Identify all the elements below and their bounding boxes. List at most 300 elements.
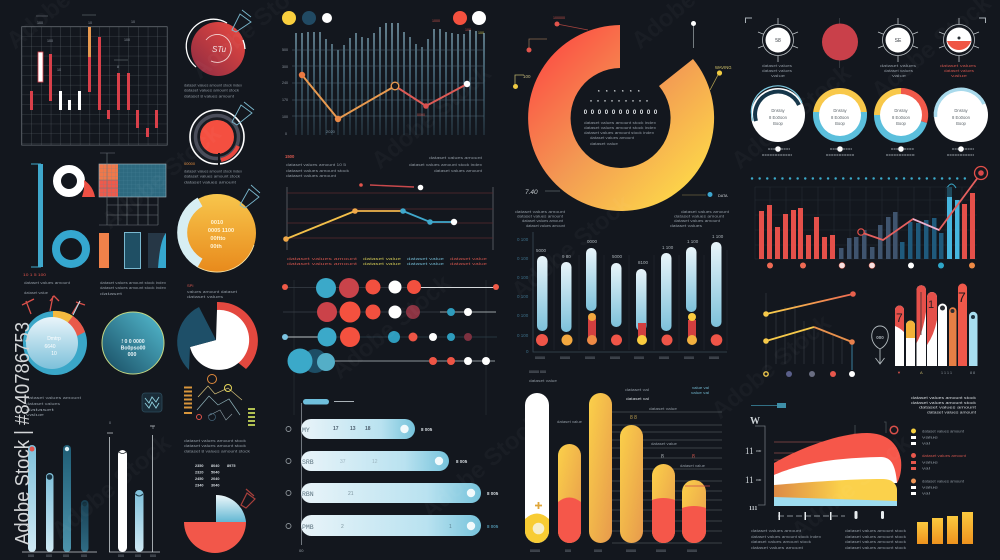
bar 2: 12	[372, 459, 378, 465]
labels: 000	[81, 554, 87, 558]
red wedge	[82, 180, 95, 197]
color-coded legend: dataset value	[450, 262, 487, 266]
watermark: vertical stock id: Adobe Stock | #840786753	[12, 322, 34, 545]
watermark: diagonal: Adobe Stock	[367, 59, 497, 175]
bar 1	[301, 419, 415, 439]
caption	[187, 283, 237, 299]
orange line	[355, 210, 403, 212]
axis labels: 300	[282, 65, 288, 69]
lines	[198, 386, 242, 400]
red arc	[221, 146, 238, 160]
caption: values amount dataset	[187, 290, 237, 294]
red arc	[217, 302, 258, 369]
panel: white and red pie	[177, 283, 258, 370]
ring card 4	[934, 88, 988, 142]
capsule bars	[537, 242, 722, 332]
value labels: 1 100	[712, 234, 724, 239]
top right text	[911, 396, 977, 414]
capsule 6	[682, 480, 706, 543]
bar 1: 17	[333, 426, 339, 432]
bar 1: 13	[350, 426, 356, 432]
x labels: 00000	[684, 356, 694, 360]
corner brackets	[746, 18, 986, 23]
labels: 0	[152, 426, 154, 430]
ring card 2	[813, 88, 867, 142]
white bar cap	[118, 451, 127, 454]
bar 8	[969, 312, 978, 366]
disc text: 10	[51, 351, 57, 357]
bright blue bars	[947, 184, 960, 259]
bracket	[755, 426, 765, 505]
panel: ring cards row	[751, 86, 988, 155]
white ring	[57, 169, 81, 193]
panel: large donut	[513, 16, 732, 228]
left text: dataset values amount	[286, 174, 336, 178]
blue bar cap	[136, 494, 143, 496]
blue bar	[38, 164, 43, 267]
trailing values: 8 005	[421, 427, 433, 432]
x labels: 000	[565, 549, 571, 553]
y labels: 0 100	[517, 237, 529, 242]
bar 3	[916, 285, 926, 366]
x labels: 00000	[659, 356, 669, 360]
center text	[584, 121, 656, 146]
axis	[22, 551, 97, 553]
gauge captions: value	[892, 74, 906, 78]
top right text: dataset values amount stock	[911, 396, 976, 400]
callout: red left	[526, 39, 547, 52]
orange block	[99, 164, 118, 180]
candle labels: 10	[88, 21, 92, 25]
gauge 2: SE	[895, 38, 902, 44]
callout: left value	[525, 189, 560, 196]
red half	[184, 522, 246, 553]
gauge captions: dataset values	[940, 64, 976, 68]
labels: 0	[109, 421, 111, 425]
axes	[533, 232, 727, 352]
ring card 3: Boop	[896, 121, 907, 126]
value labels: 1 100	[687, 239, 699, 244]
ring card 4: 8 Eo0oon	[952, 115, 971, 120]
bottom dots	[764, 371, 855, 377]
watermark: diagonal: Adobe Stock	[47, 429, 177, 545]
side text right: dataset values amount	[674, 214, 724, 218]
caption: dataset values amount stock index	[184, 84, 242, 88]
plus marker	[535, 502, 542, 509]
bar 1: 18	[365, 426, 371, 432]
blue bar	[135, 490, 144, 552]
color-coded legend: dataset value	[407, 262, 444, 266]
dotted strip	[752, 177, 968, 180]
slate rectangle	[148, 233, 166, 268]
caption: dataset 8 values amount stock	[184, 450, 250, 454]
caption: SPI	[187, 283, 193, 288]
value labels: 8100	[638, 260, 649, 265]
callout: left value: 7.40	[525, 189, 538, 196]
callout: blue right	[682, 192, 728, 198]
slate bars	[839, 212, 898, 259]
top indicator	[359, 183, 423, 190]
legend pill	[303, 399, 329, 404]
panel: mixed bar and line chart	[752, 166, 988, 268]
y axis labels: 111	[749, 506, 757, 512]
bar 4	[301, 515, 481, 536]
ring card 1: Boop	[773, 121, 784, 126]
bottom middle text: dataset values amount stock	[845, 546, 906, 550]
candle labels: 100	[124, 38, 130, 42]
top right marker	[855, 422, 886, 438]
x labels	[530, 549, 697, 553]
disc text: 0010	[211, 220, 223, 226]
blue curve fill	[158, 233, 166, 268]
captions: dataset	[100, 292, 122, 296]
block mesh	[99, 164, 166, 197]
ring card 4: Boop	[956, 121, 967, 126]
y labels: 0	[526, 349, 529, 354]
faint frame	[294, 280, 486, 415]
gauge 1: 58	[775, 38, 781, 44]
bar 5	[938, 304, 947, 366]
caption: dataset 8 values amount	[184, 94, 234, 98]
ring card 2: Boop	[835, 121, 846, 126]
panel: blue shapes and grid blocks	[23, 153, 166, 296]
color-coded legend	[287, 257, 487, 266]
bar 4: 2	[341, 524, 344, 530]
center text: dataset value	[590, 142, 618, 146]
guide lines	[612, 412, 722, 543]
markers	[299, 72, 470, 122]
color-coded legend: dataset value	[363, 262, 401, 266]
bottom middle text: dataset values amount stock	[845, 540, 906, 544]
color-coded legend: dataset value	[363, 257, 401, 261]
value labels	[536, 234, 724, 265]
y labels	[517, 237, 529, 354]
markers	[763, 291, 856, 345]
x labels: 00000	[656, 549, 666, 553]
y labels: 0 100	[517, 294, 529, 299]
left text: dataset values amount stock	[286, 169, 349, 173]
gauge captions	[762, 64, 976, 78]
grid	[755, 187, 977, 259]
orange disc	[178, 194, 256, 272]
green bars	[248, 409, 255, 425]
bar 1 cap	[30, 446, 34, 452]
bar 2	[301, 451, 449, 471]
y axis labels: 000	[756, 478, 762, 482]
captions: dataset values amount	[24, 281, 70, 285]
legend caption	[334, 400, 354, 402]
bar 1: 7	[896, 311, 903, 325]
legend tag	[751, 403, 786, 408]
frame	[287, 187, 493, 250]
disc text	[208, 220, 234, 250]
labels: 000	[46, 554, 52, 558]
panel: horizontal progress bars	[286, 399, 499, 553]
legend red	[911, 453, 966, 470]
heading: 1500	[285, 154, 295, 159]
legend yellow: dataset values amount	[922, 430, 964, 434]
sticks	[22, 296, 85, 314]
teal rectangle	[124, 232, 140, 268]
callout: yellow left	[513, 74, 531, 89]
top labels: 8 8	[630, 415, 637, 421]
x ticks	[778, 511, 884, 520]
y labels: 0 100	[517, 313, 529, 318]
legend orange: val	[922, 492, 930, 496]
y axis labels	[745, 416, 762, 512]
x labels: 00000	[585, 356, 595, 360]
left text	[286, 163, 349, 178]
red area	[774, 433, 901, 483]
x labels: A	[920, 370, 923, 375]
red segments	[588, 318, 696, 340]
icon: location pin with arrow	[872, 326, 888, 364]
disc text: Dmtrp	[47, 336, 61, 342]
callout: white top	[691, 21, 696, 48]
left text: dataset values amount 10 5	[286, 163, 346, 167]
labels	[28, 554, 87, 558]
y labels: 0 100	[517, 275, 529, 280]
watermark: diagonal: Adobe Stock	[417, 409, 547, 525]
legend yellow: val	[922, 442, 930, 446]
labels: 000	[118, 554, 124, 558]
disc text: 0005 1100	[208, 228, 234, 234]
x labels	[535, 356, 719, 360]
bar 4: 1	[928, 299, 934, 311]
watermark: diagonal: Adobe Stock	[327, 269, 457, 385]
blue line	[403, 211, 454, 222]
caption: dataset values amount stock	[184, 439, 246, 443]
x labels: 00000	[560, 356, 570, 360]
icon: cone	[232, 102, 254, 125]
axis labels	[282, 48, 288, 136]
top labels	[529, 370, 709, 468]
caption: dataset values amount stock	[184, 444, 246, 448]
ring card 1: Dnsray	[771, 108, 786, 113]
bottom left text: dataset values amount stock	[751, 540, 811, 544]
line 1	[766, 294, 853, 314]
blue ring	[56, 234, 86, 264]
legend: 2040	[211, 477, 219, 481]
legend labels	[432, 19, 484, 35]
center text: dataset values amount stock index	[584, 121, 656, 125]
legend yellow: value	[922, 436, 938, 440]
top labels: value val	[692, 386, 709, 390]
side text left: dataset values amount	[526, 224, 565, 228]
candle labels: 8	[117, 65, 119, 69]
callout: yellow left: 100	[523, 74, 531, 79]
trailing values: 8 005	[456, 459, 468, 464]
side text right: dataset values	[670, 224, 702, 228]
caption	[184, 161, 242, 184]
inner ring arc	[206, 34, 231, 62]
trend line	[860, 176, 979, 240]
side text left: dataset values amount	[522, 219, 563, 223]
watermark: diagonal: Adobe Stock	[727, 59, 857, 175]
side text left: dataset values amount	[517, 214, 563, 218]
markers	[208, 374, 216, 384]
panel: half pie	[184, 489, 255, 553]
yellow area	[774, 479, 897, 502]
row 3	[282, 327, 497, 347]
orange rectangle	[99, 233, 109, 268]
icon: cone	[232, 10, 251, 32]
legend orange: dataset values amount	[922, 480, 964, 484]
color-coded legend: dataset values amount	[287, 257, 357, 261]
blue area	[774, 497, 897, 506]
gauge captions: value	[951, 74, 967, 78]
value labels: 5000	[612, 254, 623, 259]
center title: * * * * * * * * *	[590, 99, 650, 104]
bottom dots	[767, 262, 975, 268]
white sector	[190, 310, 249, 370]
bar 4	[81, 500, 88, 552]
trailing values	[421, 427, 499, 529]
gauge captions: dataset values	[884, 69, 913, 73]
caption: dataset values	[187, 295, 223, 299]
grey guide lines	[774, 442, 825, 460]
ring card 2: 8 Eo0oon	[831, 115, 850, 120]
caption: 00000	[184, 161, 196, 166]
disc	[102, 312, 164, 374]
top labels: 8	[661, 454, 664, 460]
labels: 000	[150, 554, 156, 558]
gauge value: STu	[212, 45, 227, 54]
top labels: dataset val	[625, 388, 649, 392]
captions: dataset values amount stock index	[100, 281, 166, 285]
yellow slice	[53, 311, 73, 325]
white ring	[190, 110, 244, 164]
marker	[224, 384, 232, 392]
red bars	[759, 205, 835, 259]
bar 2 cap	[47, 474, 52, 480]
gauge captions: value	[771, 74, 785, 78]
legend: 2340	[195, 484, 203, 488]
right text	[409, 156, 482, 173]
right text: dataset values amount	[434, 169, 482, 173]
bar 4: 1	[449, 524, 452, 530]
panel: teal bar chart	[22, 396, 97, 558]
icon: cone	[241, 489, 255, 508]
center title: * * * * * *	[598, 89, 642, 94]
capsule 3	[589, 393, 612, 543]
y labels: 0 100	[517, 256, 529, 261]
ring card 1: 8 Eo0oon	[769, 115, 788, 120]
legend labels: 100	[478, 31, 484, 35]
right text: dataset values amount stock index	[409, 163, 482, 167]
blue stick	[73, 301, 80, 315]
candle labels: 100	[37, 21, 43, 25]
point labels: 2020	[326, 129, 336, 134]
capsule 5	[652, 464, 675, 543]
capsule 5 red	[652, 498, 675, 543]
disc text: 6640	[44, 344, 56, 350]
labels: 000	[28, 554, 34, 558]
card indicators	[762, 146, 974, 155]
top labels: dataset value	[680, 464, 705, 468]
caption: dataset	[26, 408, 54, 412]
bar 2: 37	[340, 459, 346, 465]
candle labels: 10	[57, 68, 61, 72]
labels: 000	[135, 554, 141, 558]
end marker	[974, 166, 988, 180]
center text: dataset values amount	[590, 136, 634, 140]
labels: 000	[63, 554, 69, 558]
caption: dataset values amount	[26, 396, 81, 400]
blue bracket	[31, 164, 40, 267]
ring card 3: 8 Eo0oon	[892, 115, 911, 120]
bar 2	[906, 320, 915, 366]
center text: dataset values amount stock index	[584, 126, 656, 130]
color-coded legend: dataset value	[407, 257, 444, 261]
row 2	[283, 302, 496, 322]
center title	[584, 89, 658, 116]
red block	[99, 180, 118, 197]
teal block	[118, 164, 166, 197]
watermark: diagonal: Adobe Stock	[97, 119, 227, 235]
panel: line icons	[184, 374, 255, 488]
bottom left text: dataset values amount stock index	[751, 535, 821, 539]
row 1	[282, 278, 499, 298]
x labels: 0000	[594, 549, 602, 553]
panel: segmented blue pie	[22, 296, 87, 375]
y axis labels: W	[750, 416, 760, 427]
candle labels: 100	[47, 39, 53, 43]
spike bars	[296, 23, 484, 135]
pale quarter	[216, 495, 246, 522]
icon: cone	[240, 185, 260, 208]
watermark: diagonal: Adobe Stock	[507, 189, 637, 305]
navy bars	[900, 218, 944, 259]
frame	[107, 426, 160, 552]
value labels: 9 80	[562, 254, 571, 259]
outer ring arc	[186, 19, 245, 67]
axis labels: 240	[282, 81, 288, 85]
trailing values: 8 005	[487, 524, 499, 529]
line red segment	[395, 84, 467, 106]
axis labels: 500	[282, 48, 288, 52]
legend: 8975	[227, 464, 235, 468]
axis labels: 0	[285, 132, 287, 136]
white area	[774, 457, 897, 490]
gauge captions: dataset values	[944, 69, 974, 73]
legend	[195, 464, 235, 488]
panel: radial gauges row	[746, 18, 986, 78]
yellow line	[286, 211, 355, 239]
capsule 6 red	[682, 506, 706, 543]
watermark: diagonal: Adobe Stock	[707, 309, 837, 425]
panel: teal disc	[102, 312, 164, 374]
ring card 3: Dnsray	[894, 108, 909, 113]
legend: 8040	[211, 464, 219, 468]
panel: tall capsule chart	[525, 370, 722, 553]
red core	[200, 120, 234, 154]
side text right: dataset values amount	[681, 210, 729, 214]
candle labels: 10	[131, 20, 135, 24]
trend highlight	[913, 219, 939, 230]
legend labels: 100	[465, 28, 471, 32]
legend orange: value	[922, 486, 938, 490]
y axis labels: 11	[745, 475, 754, 485]
red slice	[66, 316, 85, 337]
grid	[22, 27, 167, 145]
caption: dataset values amount stock	[184, 174, 240, 178]
foot label: 00	[299, 548, 304, 553]
base dots	[536, 313, 722, 346]
bar 3 cap	[65, 447, 69, 451]
gauge captions: dataset values	[762, 64, 792, 68]
panel: white bar chart	[107, 421, 160, 558]
